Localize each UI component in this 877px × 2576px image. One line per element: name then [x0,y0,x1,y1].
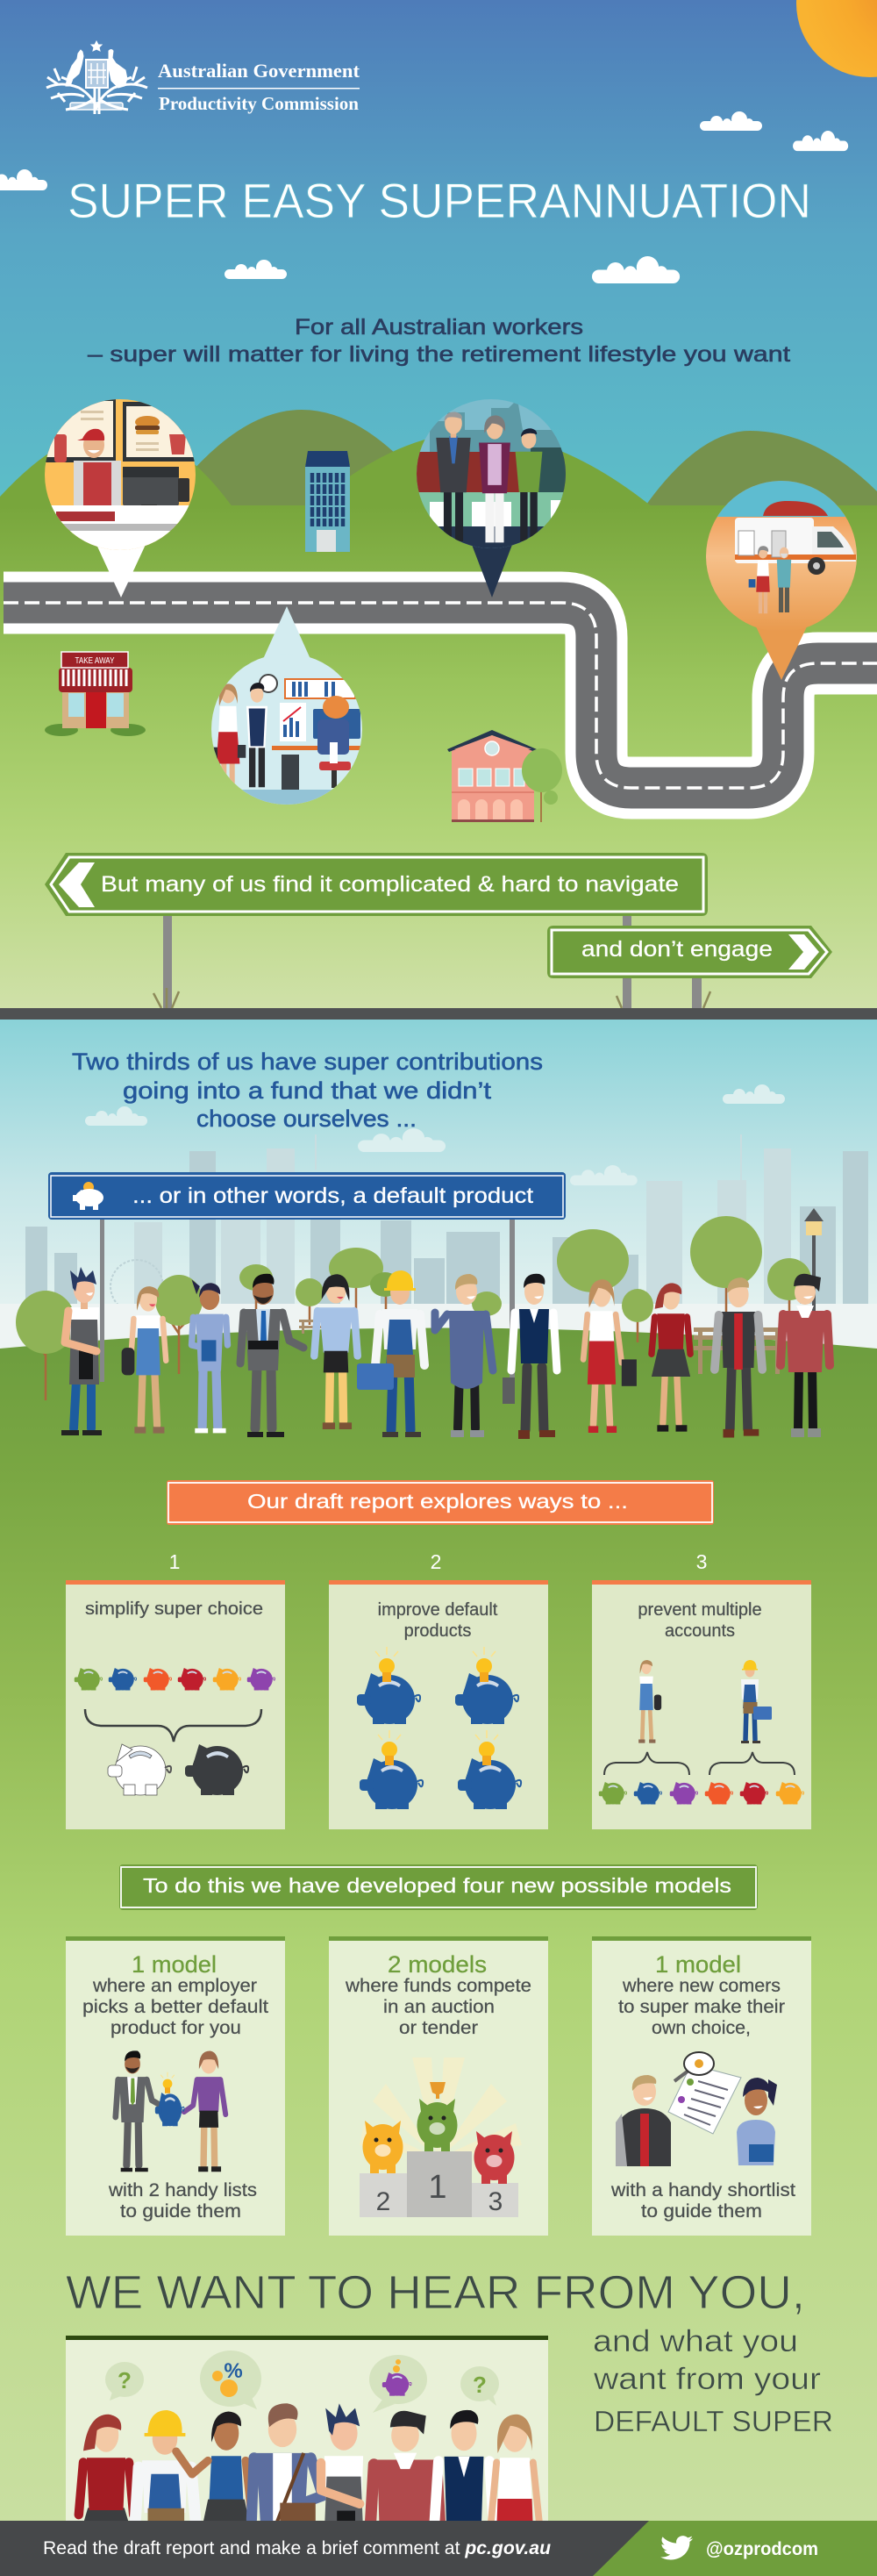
sky background [0,0,877,526]
text block: what you want from default super [593,2324,833,2437]
retired man [777,547,791,612]
people row [76,2403,540,2558]
icon: office tower [305,451,350,552]
icon: six small pigs [75,1668,275,1691]
bubble: percent and coins: % [224,2359,243,2383]
retired woman [749,546,770,613]
text block: what you want from default super: want from your [593,2362,821,2396]
young man [516,428,542,541]
podium [360,2151,518,2217]
number 3: 3 [696,1550,707,1573]
person: woman in red skirt [491,2415,540,2558]
number 2: 2 [431,1550,441,1573]
icon: twitter bird [660,2536,693,2559]
icon: trophy [430,2082,446,2099]
heading: we want to hear from you: WE WANT TO HEAR FROM YOU, [66,2266,805,2319]
panel: 3 prevent multiple accounts [592,1550,811,1829]
subtitle: – super will matter for living the retirement lifestyle you want [88,342,790,367]
sign: and don't engage [547,926,832,978]
text block: two thirds of us: choose ourselves ... [196,1106,417,1132]
panel text: or tender [399,2018,478,2038]
banner text: Our draft report explores ways to ... [247,1490,628,1513]
subtitle: For all Australian workers [295,315,583,340]
park trees [16,1216,811,1400]
ground two [0,1328,877,2576]
hills [0,410,877,526]
panel: 1 simplify super choice [66,1550,285,1829]
pin: retirement caravan couple [702,478,859,680]
icon: pigs with light bulbs [357,1647,521,1809]
person: woman in blue top [176,2411,253,2543]
panel heading: 2 models [388,1951,487,1978]
icon: white pig [108,1744,171,1795]
logo: Australian Government Productivity Commission [46,41,360,114]
banner: our draft report [167,1480,714,1525]
street lamp [804,1208,824,1325]
sign posts [153,916,710,1009]
default product sign posts [100,1220,515,1382]
icon: black pig [185,1744,248,1795]
panel text: accounts [665,1621,735,1641]
pin: office workers [210,606,368,807]
illustration: employer [116,2050,161,2172]
panel text: in an auction [383,1997,495,2017]
pin: older couple and young worker [417,399,566,597]
panel text: with a handy shortlist [610,2180,795,2200]
panel text: simplify super choice [85,1599,263,1619]
panel text: own choice, [652,2018,751,2038]
group of workers [61,1267,830,1439]
office woman [214,683,240,784]
shop sign text: TAKE AWAY [75,655,114,666]
panel: 1 model employer [66,1936,285,2236]
text block: two thirds of us: going into a fund that we didn’t [123,1077,492,1104]
bubble: question mark: ? [473,2372,487,2398]
road [4,603,877,788]
bubble: percent and coins [200,2351,261,2409]
text block: two thirds of us: Two thirds of us have super contributions [72,1048,543,1075]
worker: teen in red hoodie [781,1274,830,1437]
panel text: to guide them [641,2201,762,2222]
sign text: and don’t engage [581,937,773,962]
panel text: to super make their [618,1997,785,2017]
panel heading: 1 model [132,1951,217,1978]
person: man in blazer with bag [252,2403,323,2538]
bubble: question mark [105,2362,144,2401]
person: woman in red jacket [76,2415,136,2547]
clouds in top sky [0,111,848,283]
panel text: prevent multiple [638,1600,762,1620]
icon: red pig [474,2131,514,2184]
section divider bar [0,1008,877,1020]
icon: piggy bank with coin [73,1182,103,1210]
worker: woman in red skirt [583,1279,637,1433]
sign: default product [48,1172,566,1220]
pin: fast food worker [44,399,202,597]
wordmark: Productivity Commission: Productivity Commission [159,93,359,114]
icon: six small pigs [599,1782,803,1805]
icon: sun [796,0,877,77]
sign: complicated and hard to navigate [45,853,708,916]
illustration: young man [616,2075,671,2166]
worker: man in grey suit [240,1274,303,1437]
panel: 2 models auction [329,1936,548,2236]
icon: green pig [417,2099,458,2151]
worker: nurse [192,1280,227,1433]
text block: two thirds of us [72,1048,543,1132]
podium: 3 [488,2187,503,2216]
footer text: Read the draft report and make a brief comment at pc.gov.au [43,2538,551,2558]
worker: man in grey jacket [715,1277,762,1438]
panel text [345,1976,531,2038]
panel: 2 improve default products [329,1550,548,1829]
panel text [82,1976,268,2222]
panel text [610,1976,795,2222]
office man [238,683,267,787]
brace [85,1709,261,1742]
podium: 1 [428,2169,447,2206]
wordmark: Australian Government: Australian Government [158,60,360,82]
park benches [299,1320,783,1374]
number 1: 1 [169,1550,180,1573]
city skyline [0,1134,877,1353]
panel: 1 model new comers [592,1936,811,2236]
person: teen in red hoodie [370,2411,440,2541]
small builder [741,1660,772,1743]
icon: coat of arms crest [46,41,147,114]
older woman [479,415,510,542]
icon: town building with tree [447,730,562,822]
panel text: where funds compete [345,1976,531,1996]
worker: waiter [61,1267,102,1435]
person: man in navy vest [434,2410,494,2549]
banner: four new possible models [119,1864,758,1910]
podium: 2 [376,2187,390,2216]
text block: what you want from default super: and what you [593,2324,798,2358]
worker: woman in light blue shirt [314,1274,358,1429]
worker: woman in red jacket [652,1283,690,1432]
small woman [638,1660,661,1743]
worker: woman in denim overalls [122,1286,166,1434]
bubble: question mark: ? [118,2367,132,2394]
worker: builder with yellow hard hat [357,1270,424,1437]
panel: group of people with thought bubbles [66,2336,548,2558]
worker: man in blue sweater with phone [435,1274,493,1437]
banner text: To do this we have developed four new possible models [143,1874,731,1897]
person: builder [135,2410,196,2538]
footer [0,2521,877,2576]
sign text: But many of us find it complicated & hard to navigate [101,872,679,897]
panel text: to guide them [120,2201,241,2222]
title: SUPER EASY SUPERANNUATION [68,173,811,228]
bubble: question mark [460,2366,499,2406]
older man [436,411,471,541]
sign text: ... or in other words, a default product [132,1184,533,1208]
section two sky [0,1020,877,1353]
worker: man in navy vest [503,1274,557,1439]
panel text: with 2 handy lists [108,2180,257,2200]
panel text: improve default [378,1600,498,1620]
text block: what you want from default super: DEFAULT SUPER [594,2405,833,2437]
panel text: where new comers [622,1976,781,1996]
subtitle [88,315,790,367]
rays [360,2057,522,2158]
illustration: worker [184,2051,225,2172]
panel text: products [404,1621,471,1641]
panel text: product for you [111,2018,241,2038]
person: waiter [321,2403,363,2545]
panel heading: 1 model [655,1951,741,1978]
icon: blue pig with bulb [155,2072,184,2126]
braces [604,1752,795,1775]
icon: take away shop [45,652,146,736]
pale clouds [85,1084,785,1185]
illustration: list document and magnifier [668,2052,741,2134]
bubble: piggy bank [369,2355,427,2413]
panel text: picks a better default [82,1997,268,2017]
icon: yellow pig [363,2121,403,2173]
illustration: nurse [737,2078,777,2165]
ground [0,505,877,1010]
twitter handle: @ozprodcom [706,2539,818,2559]
panel text: where an employer [92,1976,257,1996]
